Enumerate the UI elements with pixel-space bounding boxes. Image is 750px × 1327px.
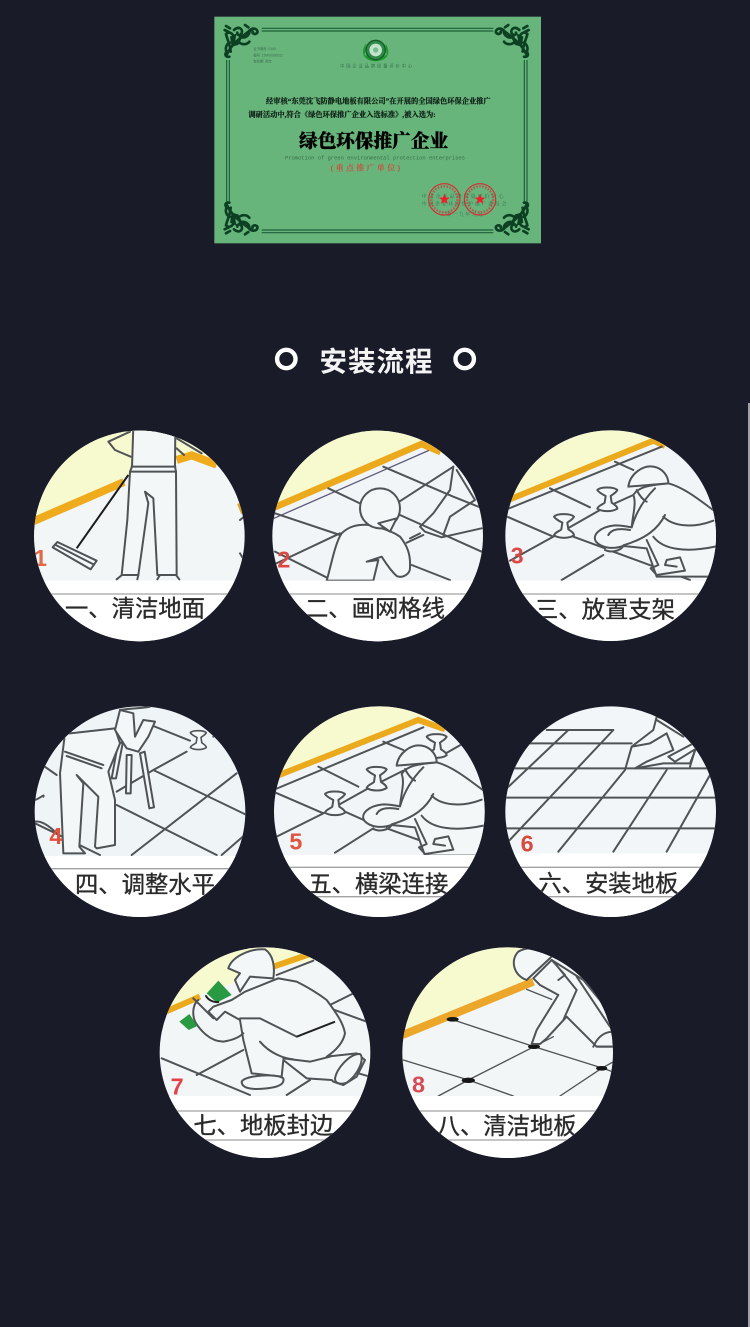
step caption: 五、横梁连接 — [308, 871, 448, 897]
step 3: 放置支架 — [505, 430, 716, 641]
step number: 1 — [34, 545, 47, 571]
step 4: 调整水平 — [34, 706, 246, 917]
step number: 2 — [277, 547, 290, 573]
heading: 安装流程 — [277, 346, 474, 377]
step number: 7 — [171, 1074, 184, 1100]
certificate red note: (重点推广单位) — [331, 162, 403, 172]
icon: certificate emblem — [363, 40, 388, 61]
step 8: 清洁地板 — [402, 947, 613, 1158]
step caption: 四、调整水平 — [75, 872, 215, 898]
step caption: 一、清洁地面 — [65, 596, 205, 622]
certificate panel — [214, 17, 541, 243]
step number: 8 — [412, 1072, 425, 1098]
step caption: 三、放置支架 — [535, 596, 675, 622]
certificate meta text: 编号: 15M00080012 — [253, 52, 283, 57]
issuer signature text: 二零一九年九月 — [440, 211, 484, 218]
heading text: 安装流程 — [320, 346, 434, 377]
step 6: 安装地板 — [505, 706, 716, 917]
certificate body text: 调研活动中,符合《绿色环保推广企业入选标准》,被入选为: — [248, 110, 436, 119]
certificate body text: 经审核“东莞沈飞防静电地板有限公司”在开展的全国绿色环保企业推广 — [266, 97, 491, 106]
icon: right ring — [456, 350, 474, 368]
step number: 4 — [49, 823, 62, 849]
step caption: 二、画网格线 — [305, 596, 445, 622]
step 7: 地板封边 — [160, 947, 370, 1158]
certificate meta text: 证书编号: 0365 — [253, 46, 276, 51]
step 1: 清洁地面 — [34, 430, 245, 642]
certificate English subtitle: Promotion of green environmental protection enterprises — [285, 155, 465, 162]
step 2: 画网格线 — [272, 430, 483, 642]
seals — [429, 184, 496, 215]
issuer signature text: 中国企业品牌质量评价中心 — [422, 193, 505, 200]
certificate meta text: 有效期: 两年 — [253, 59, 272, 64]
issuer name: 中国企业品牌质量评价中心 — [340, 62, 414, 69]
step caption: 八、清洁地板 — [437, 1113, 577, 1139]
step number: 3 — [511, 542, 524, 568]
step number: 6 — [521, 831, 534, 857]
step caption: 六、安装地板 — [538, 871, 678, 897]
step number: 5 — [289, 828, 302, 854]
step caption: 七、地板封边 — [193, 1112, 333, 1138]
icon: left ring — [277, 350, 295, 368]
icon: corner ornaments — [225, 25, 529, 234]
certificate title: 绿色环保推广企业 — [299, 131, 449, 153]
step 5: 横梁连接 — [274, 706, 485, 917]
issuer signature text: 中国企业环境保护推广委员会 — [422, 200, 508, 207]
